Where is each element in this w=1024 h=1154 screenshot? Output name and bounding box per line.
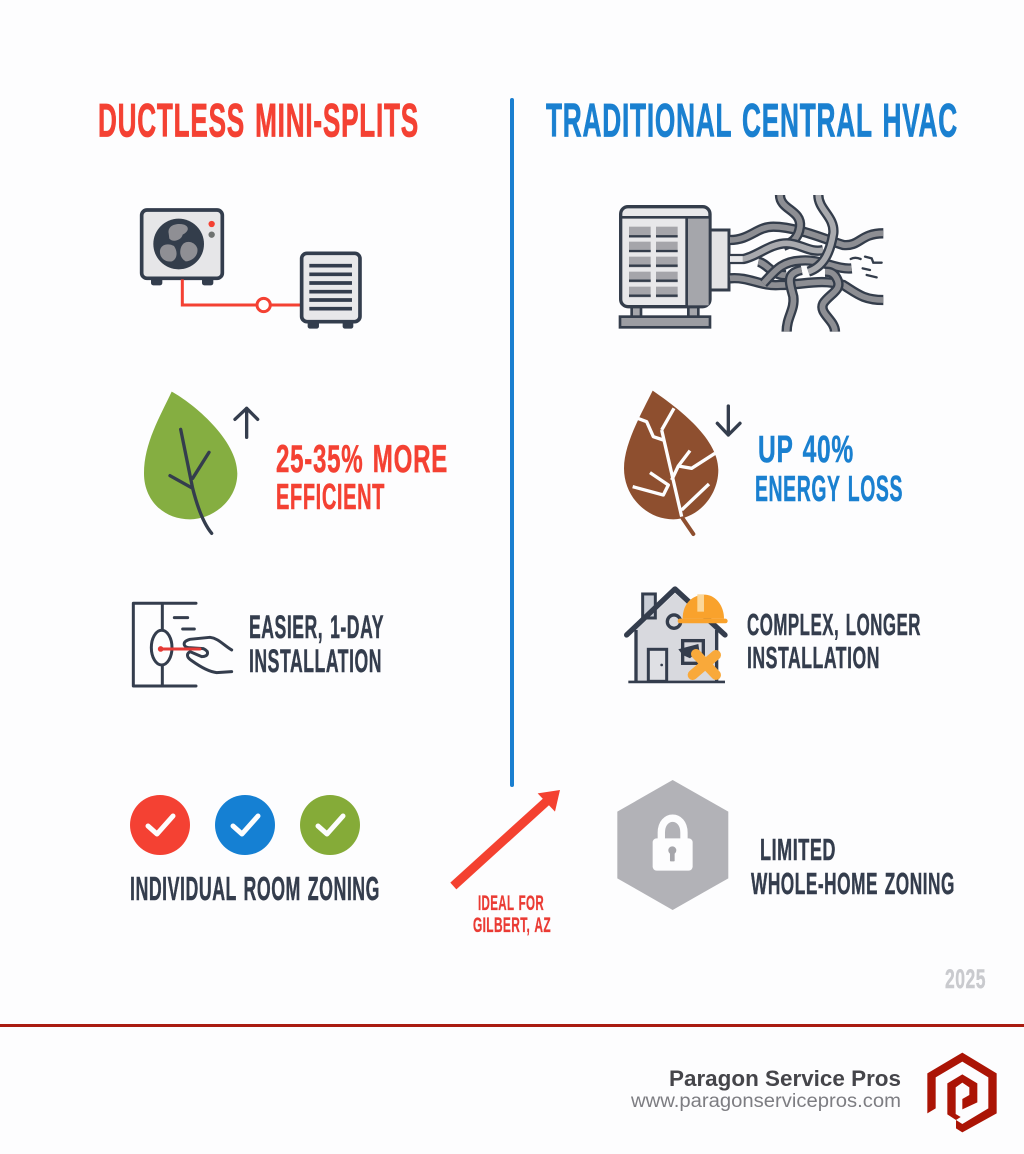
- connector box: [710, 230, 729, 290]
- footer website: www.paragonservicepros.com: [630, 1091, 901, 1112]
- legs and base: [632, 307, 641, 317]
- text: up 40% energy loss: UP 40%: [758, 429, 854, 471]
- text: limited whole-home zoning: LIMITED: [760, 832, 836, 867]
- icon: hexagon padlock: [617, 780, 728, 910]
- text: limited whole-home zoning: [751, 832, 955, 901]
- text: 25-35% more efficient: [276, 438, 448, 517]
- text: 25-35% more efficient: 25-35% MORE: [276, 438, 448, 481]
- icon: brown cracked leaf with down arrow: [624, 391, 740, 534]
- icon: house with hard hat and tools: [627, 589, 728, 682]
- footer company name: Paragon Service Pros: [669, 1066, 901, 1091]
- text: up 40% energy loss: [755, 429, 903, 509]
- text: complex, longer installation: [747, 607, 921, 675]
- title: ductless mini-splits: DUCTLESS MINI-SPLITS: [98, 94, 419, 146]
- icon: central HVAC unit with tangled ducts: [620, 195, 883, 332]
- text: easier, 1-day installation: [249, 609, 384, 679]
- text: ideal for Gilbert, AZ: [473, 892, 551, 937]
- text: complex, longer installation: INSTALLATION: [747, 640, 880, 675]
- arrow: ideal for Gilbert: [453, 790, 560, 886]
- footer rule: [0, 1024, 1024, 1027]
- text: individual room zoning: INDIVIDUAL ROOM ZONING: [130, 870, 380, 907]
- icon: three check circles: [130, 795, 360, 855]
- unit body: [621, 207, 710, 307]
- text: ideal for Gilbert, AZ: IDEAL FOR: [478, 892, 544, 915]
- text: up 40% energy loss: ENERGY LOSS: [755, 468, 903, 509]
- icon: green leaf with up arrow: [144, 392, 258, 533]
- icon: ductless mini-split units: [142, 210, 360, 329]
- icon: easy installation hand and wall: [133, 603, 232, 686]
- year label: 2025: [945, 964, 986, 994]
- text: 25-35% more efficient: EFFICIENT: [276, 476, 385, 517]
- text: easier, 1-day installation: EASIER, 1-DAY: [249, 609, 384, 645]
- text: ideal for Gilbert, AZ: GILBERT, AZ: [473, 914, 551, 937]
- logo: Paragon hexagon mark: [927, 1053, 997, 1132]
- center divider line: [510, 98, 514, 787]
- text: easier, 1-day installation: INSTALLATION: [249, 643, 382, 679]
- tangled ducts: [730, 195, 883, 332]
